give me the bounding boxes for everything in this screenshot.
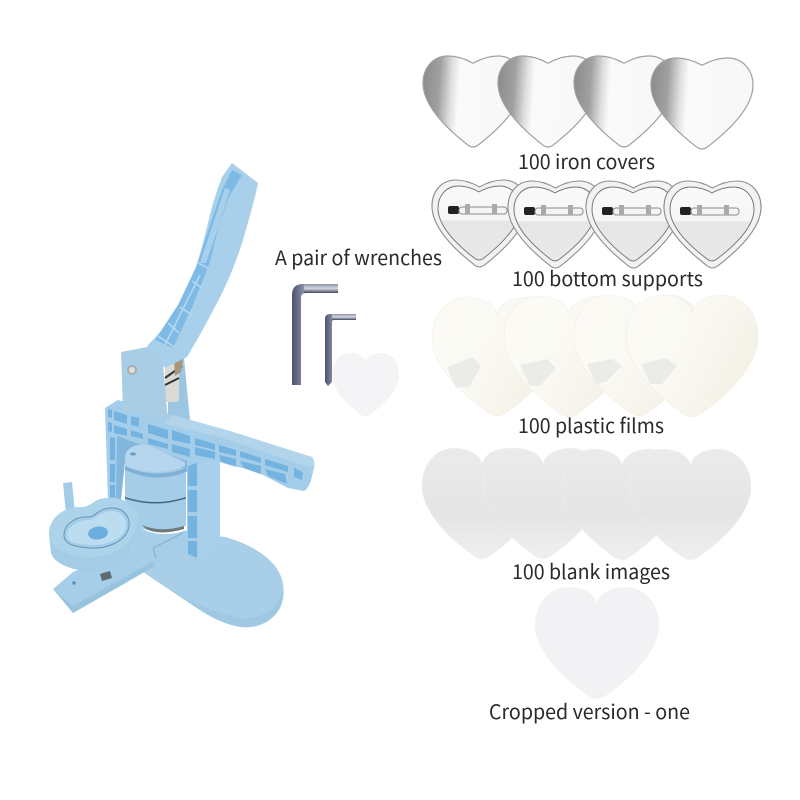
frame ribs [108,409,303,558]
support 1 [432,180,527,267]
stacked press cylinders [125,445,186,532]
row: plastic films [432,295,758,417]
support 2 [508,181,603,268]
label: iron covers: 100 iron covers [518,146,655,175]
row: iron covers [423,56,753,149]
label: wrenches: A pair of wrenches [275,242,442,271]
cropped heart [535,587,659,699]
label: blank images: 100 blank images [512,556,670,585]
handle ribs [158,263,208,347]
hinge bolt [127,365,137,375]
lower platform under cylinders [130,526,188,570]
label: cropped version: Cropped version - one [489,696,690,725]
inner arch shadow [116,436,187,500]
row: blank images [422,448,751,560]
support 3 [586,181,681,268]
press frame with long grip [105,400,314,566]
label: bottom supports: 100 bottom supports [512,263,703,292]
post behind hinge [168,358,190,425]
large hex wrench [292,284,338,385]
badge press machine [49,163,314,627]
label: plastic films: 100 plastic films [518,410,664,439]
row: bottom supports [432,180,761,268]
die post [63,482,75,514]
slide arm [53,533,183,613]
small hex wrench [325,314,356,386]
press base [140,534,284,627]
hinge washers [165,358,183,402]
hinge cap [121,347,168,420]
small cropped heart [332,353,399,416]
support 4 [664,181,761,268]
heart die [49,498,137,571]
handle [147,163,258,368]
